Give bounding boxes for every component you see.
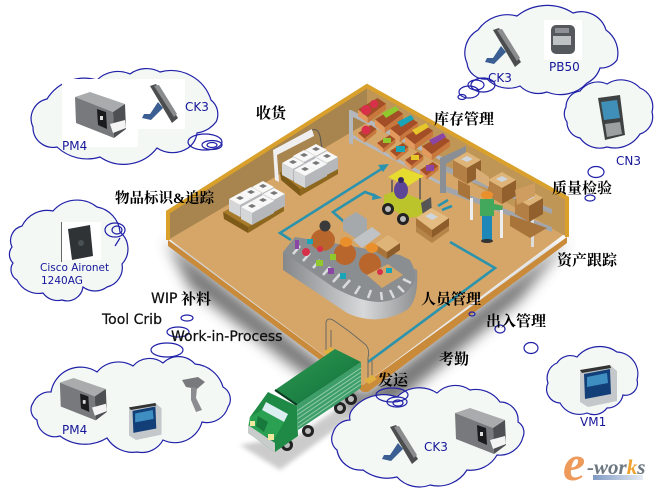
forklift <box>382 168 432 225</box>
thought bubbles <box>376 388 408 407</box>
label: inventory: 库存管理 <box>434 110 494 128</box>
label: attendance: 考勤 <box>439 350 469 368</box>
label: WIP <box>151 290 211 308</box>
pallet: front <box>223 181 285 233</box>
shelf with cartons <box>446 152 552 247</box>
back conveyor and machine <box>343 212 367 238</box>
label CK3: CK3 <box>424 440 448 454</box>
thought bubbles <box>151 315 193 357</box>
printer PB50 <box>551 25 575 54</box>
floor shadow <box>166 240 568 420</box>
label: shipping: 发运 <box>378 372 409 389</box>
panel: warehouse <box>166 86 568 420</box>
cloud: PM4 bottom left <box>31 315 230 453</box>
truck shadow <box>240 392 375 470</box>
thought bubbles <box>588 166 604 178</box>
thought bubbles <box>458 78 495 100</box>
thought bubbles <box>105 223 125 246</box>
access point <box>68 225 93 260</box>
label: Work-in-Process: Work-in-Process <box>171 329 282 345</box>
teal flow arrows <box>280 168 495 362</box>
wall top rim <box>168 86 567 240</box>
warehouse front edge <box>168 237 567 392</box>
thought bubbles <box>524 342 538 354</box>
label Cisco Aironet 1240AG <box>40 262 109 287</box>
label: access: 出入管理 <box>486 312 546 330</box>
label: receiving: 收货 <box>256 104 288 122</box>
cloud: CK3 + PB50 top right <box>458 5 618 100</box>
label: tracking: 物品标识&追踪 <box>115 189 216 207</box>
label: WIP: WIP <box>151 291 177 307</box>
label Cisco Aironet 1240AG: 1240AG <box>41 275 83 287</box>
label PB50: PB50 <box>549 60 580 74</box>
truck cab <box>248 392 298 452</box>
label CN3: CN3 <box>616 154 641 168</box>
scanner <box>182 377 205 412</box>
label VM1: VM1 <box>580 415 606 429</box>
cloud: CK3 bottom <box>332 385 524 487</box>
conveyor line <box>283 212 417 319</box>
thought bubbles <box>188 134 222 150</box>
label CK3: CK3 <box>488 71 512 85</box>
label CK3: CK3 <box>185 100 209 114</box>
label: assets: 资产跟踪 <box>557 251 618 269</box>
conveyor workers <box>311 220 381 275</box>
warehouse floor <box>168 118 567 385</box>
right back wall <box>367 88 567 237</box>
forklift cargo <box>416 208 449 243</box>
label PM4: PM4 <box>62 423 87 437</box>
small bubbles by 出入管理 <box>469 195 595 333</box>
shelf with colour bins <box>349 98 466 193</box>
label PM4: PM4 <box>62 139 87 153</box>
label Cisco Aironet 1240AG: Cisco Aironet <box>40 262 109 274</box>
cloud: CN3 <box>564 80 653 178</box>
RFID gate at dock <box>323 319 377 384</box>
cloud: Cisco Aironet <box>9 200 128 301</box>
cloud: VM1 <box>524 342 638 429</box>
worker at shelf <box>480 191 503 243</box>
device CN3 <box>598 95 625 140</box>
left back wall <box>168 88 367 240</box>
label: WIP: 补料 <box>181 290 211 308</box>
logo: e-works: -works <box>587 455 645 479</box>
cloud: PM4 + CK3 top left <box>31 69 222 164</box>
logo: e-works <box>563 435 645 491</box>
truck wheels <box>281 393 357 451</box>
logo: e-works: e <box>563 435 585 491</box>
label: quality: 质量检验 <box>552 179 612 197</box>
label: staff: 人员管理 <box>421 290 481 308</box>
pallet: back with gate <box>273 129 338 196</box>
truck <box>240 349 375 470</box>
truck cargo box <box>275 349 361 430</box>
label: Tool Crib: Tool Crib <box>101 312 162 328</box>
